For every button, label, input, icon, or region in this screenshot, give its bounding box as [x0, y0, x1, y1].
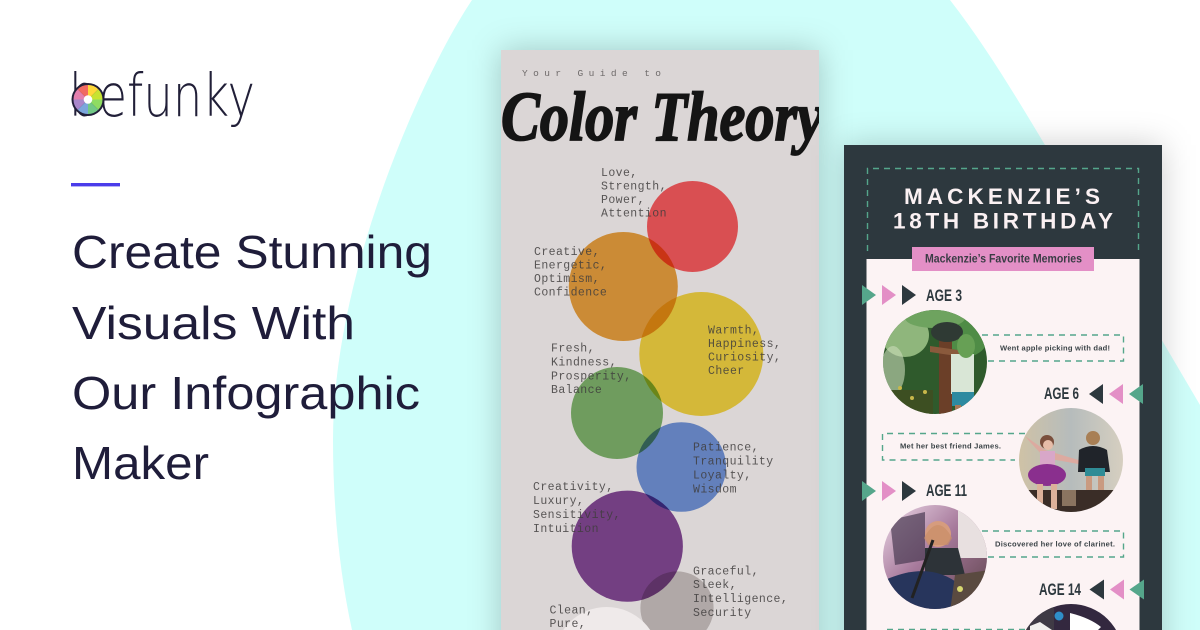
- shadow: color theory card: [501, 50, 819, 630]
- text: green meanings: Fresh,: [551, 343, 595, 356]
- text: yellow meanings: Happiness,: [708, 338, 781, 351]
- text: yellow meanings: Curiosity,: [708, 352, 781, 365]
- age 6 marker: [1044, 384, 1143, 404]
- text: blue meanings: Wisdom: [693, 483, 737, 496]
- callout: age 11: [982, 531, 1124, 557]
- text: purple meanings: Sensitivity,: [533, 509, 621, 522]
- birthday title: [893, 184, 1113, 234]
- text: blue meanings: Loyalty,: [693, 470, 752, 482]
- text: orange meanings: Energetic,: [534, 260, 607, 273]
- text: orange meanings: Optimism,: [534, 273, 600, 286]
- panel: birthday card: [844, 145, 1162, 630]
- age 3 marker: [862, 285, 962, 305]
- main heading: Our Infographic: [72, 367, 420, 419]
- text: orange meanings: Creative,: [534, 246, 600, 259]
- text: purple meanings: Intuition: [533, 523, 599, 536]
- color circles: [554, 181, 763, 630]
- pink banner: Mackenzie’s Favorite Memories: [925, 252, 1082, 266]
- panel: color theory card: [501, 50, 824, 630]
- photo: clarinet: [882, 505, 990, 612]
- text: green meanings: Balance: [551, 384, 602, 397]
- text: yellow meanings: Warmth,: [708, 324, 759, 338]
- text: red meanings: Attention: [601, 208, 667, 221]
- text: red meanings: Strength,: [601, 181, 667, 194]
- age 11 marker: AGE 11: [926, 482, 967, 500]
- background mint blob: [333, 0, 1200, 630]
- text: purple meanings: Luxury,: [533, 495, 584, 508]
- text: yellow meanings: Cheer: [708, 365, 745, 378]
- main heading: Visuals With: [72, 297, 355, 349]
- pink banner: [912, 247, 1094, 271]
- text: gray meanings: Sleek,: [693, 579, 737, 592]
- main heading: [72, 226, 432, 489]
- callout: age 3: Went apple picking with dad!: [1000, 344, 1110, 352]
- text: blue meanings: Patience,: [693, 442, 759, 455]
- text: green meanings: Prosperity,: [551, 370, 632, 383]
- birthday title: MACKENZIE’S: [904, 184, 1100, 209]
- main heading: Maker: [72, 437, 209, 489]
- callout: age 11: Discovered her love of clarinet.: [995, 540, 1115, 548]
- cream content panel: [866, 259, 1140, 630]
- age 14 marker: [1039, 580, 1144, 600]
- text: blue meanings: Tranquility: [693, 456, 774, 469]
- age 6 marker: AGE 6: [1044, 385, 1079, 403]
- text: gray meanings: Intelligence,: [693, 593, 788, 606]
- callout: age 3: [982, 335, 1124, 361]
- text: green meanings: Kindness,: [551, 356, 617, 370]
- birthday title: 18TH BIRTHDAY: [893, 208, 1113, 234]
- text: gray meanings: Graceful,: [693, 565, 759, 578]
- header dashed frame: [868, 168, 1138, 251]
- shadow: birthday card: [844, 145, 1162, 630]
- text: orange meanings: Confidence: [534, 286, 607, 300]
- callout: age 14: [882, 628, 1025, 630]
- logo color wheel: [72, 83, 104, 116]
- text: purple meanings: Creativity,: [533, 481, 614, 494]
- accent rule: [71, 183, 120, 186]
- card eyebrow: Your Guide to: [522, 68, 661, 79]
- age 14 marker: AGE 14: [1039, 581, 1082, 599]
- text: white meanings: Clean,: [550, 604, 593, 617]
- text: red meanings: Power,: [601, 194, 645, 207]
- photo: apple picking: [881, 308, 989, 417]
- text: red meanings: Love,: [601, 167, 638, 180]
- callout: age 6: [882, 434, 1025, 460]
- age 3 marker: AGE 3: [926, 287, 962, 305]
- callout: age 6: Met her best friend James.: [900, 442, 1001, 450]
- logo wordmark: befunky: [69, 61, 255, 130]
- photo: age 14: [1026, 604, 1116, 630]
- logo: befunky: [69, 61, 255, 130]
- card title: Color Theory: [501, 79, 824, 156]
- text: gray meanings: Security: [693, 607, 752, 620]
- age 11 marker: [862, 481, 967, 501]
- main heading: Create Stunning: [72, 226, 432, 278]
- photo: best friend: [1019, 408, 1123, 512]
